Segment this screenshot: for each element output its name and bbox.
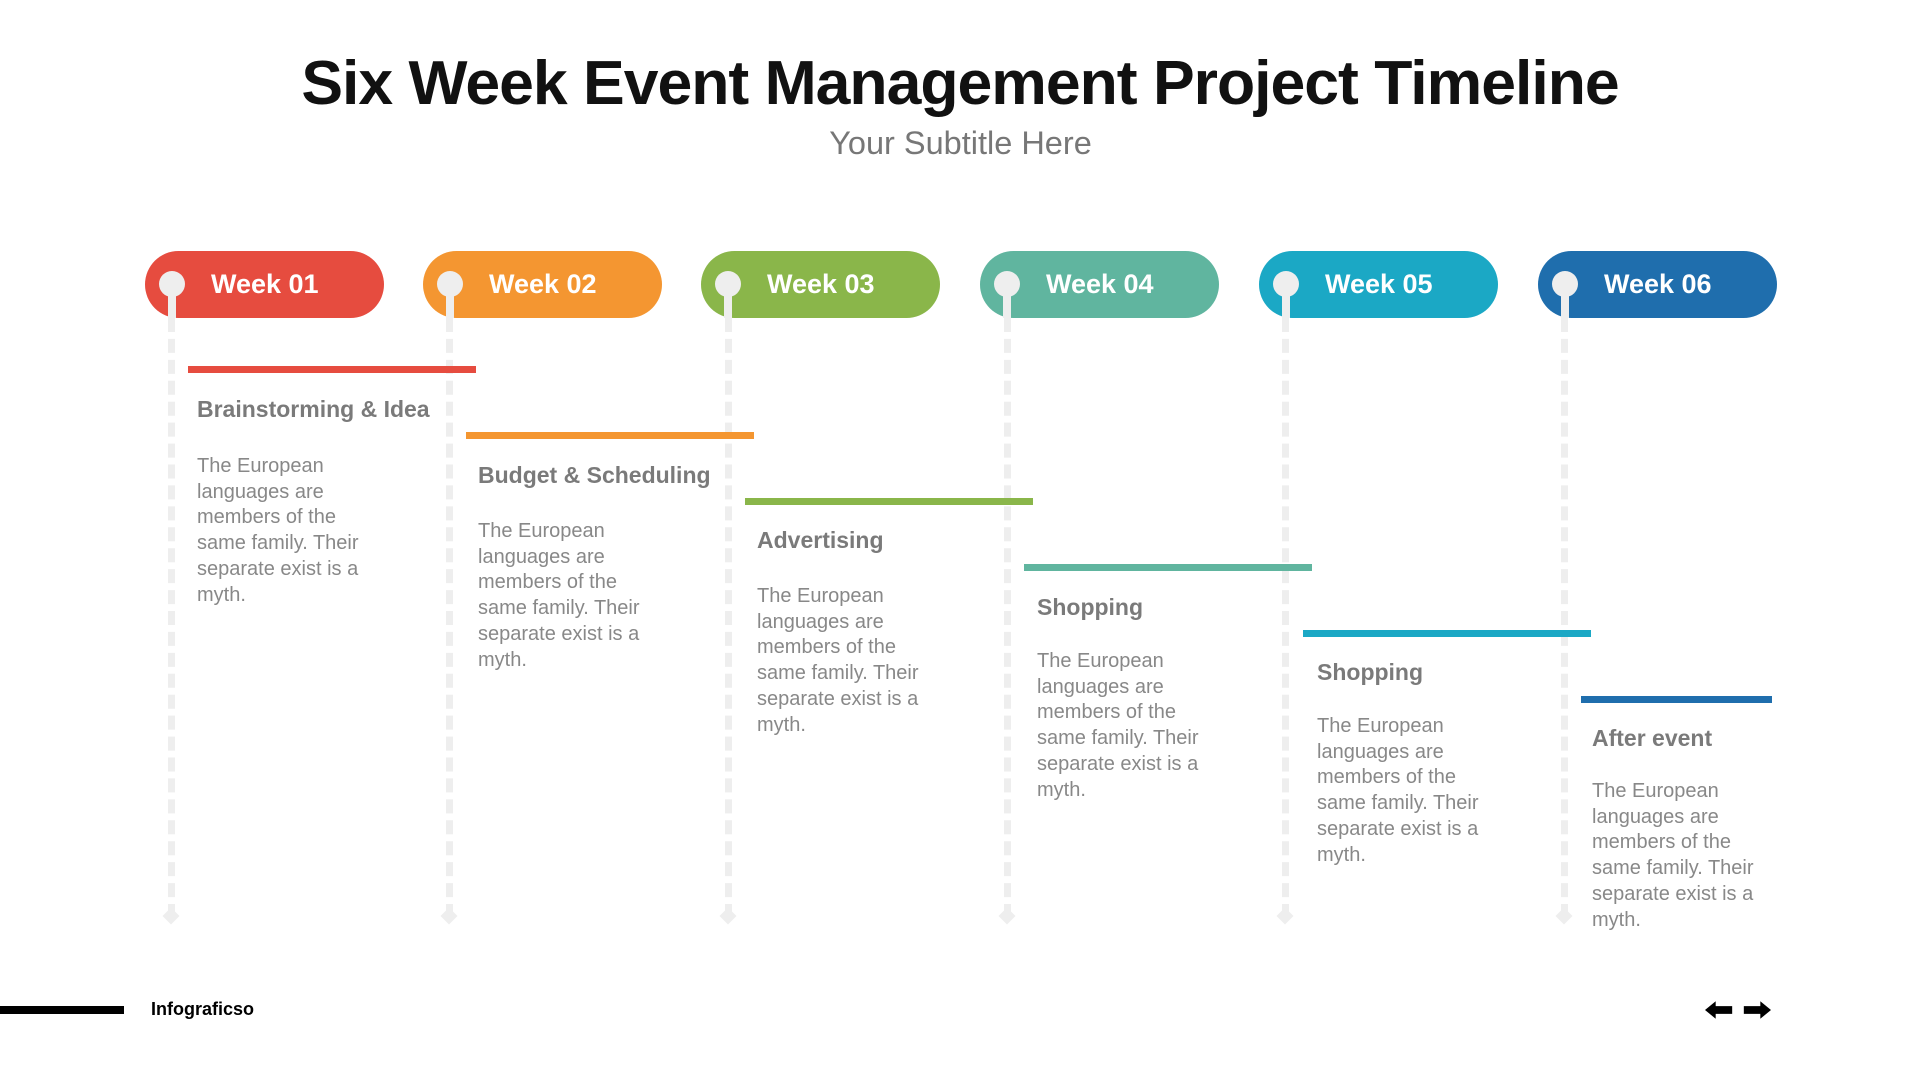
heading 2: Budget & Scheduling xyxy=(478,462,711,488)
dashed line 6 xyxy=(1561,318,1568,918)
text 2: The European languages are members of the same family. Their separate exist is a myth. xyxy=(478,520,640,671)
heading 6: After event xyxy=(1592,725,1712,751)
diamond 4 xyxy=(999,908,1015,924)
bar 2 xyxy=(466,432,754,439)
footer bar xyxy=(0,1006,124,1014)
pill: week 06 xyxy=(1538,251,1777,318)
heading 5: Shopping xyxy=(1317,659,1423,685)
bar 6 xyxy=(1581,696,1772,703)
dashed line 4 xyxy=(1004,318,1011,918)
icon: nav arrows xyxy=(1705,1001,1771,1019)
pill: week 05: Week 05 xyxy=(1325,269,1433,299)
diamond 2 xyxy=(441,908,457,924)
pill: week 01 xyxy=(145,251,384,318)
bar 1 xyxy=(188,366,476,373)
dashed line 3 xyxy=(725,318,732,918)
title: Six Week Event Management Project Timeline xyxy=(301,48,1619,118)
diamond 5 xyxy=(1277,908,1293,924)
bar 5 xyxy=(1303,630,1591,637)
dashed line 5 xyxy=(1282,318,1289,918)
diamond 6 xyxy=(1556,908,1572,924)
text 1: The European languages are members of the same family. Their separate exist is a myth. xyxy=(197,455,359,606)
pill: week 03 xyxy=(701,251,940,318)
bar 4 xyxy=(1024,564,1312,571)
text 3: The European languages are members of the same family. Their separate exist is a myth. xyxy=(757,585,919,736)
text 5: The European languages are members of the same family. Their separate exist is a myth. xyxy=(1317,715,1479,866)
bar 3 xyxy=(745,498,1033,505)
heading 4: Shopping xyxy=(1037,594,1143,620)
pill: week 06: Week 06 xyxy=(1604,269,1712,299)
text 6: The European languages are members of the same family. Their separate exist is a myth. xyxy=(1592,780,1754,931)
dashed line 2 xyxy=(446,318,453,918)
pill: week 03: Week 03 xyxy=(767,269,875,299)
pill: week 04 xyxy=(980,251,1219,318)
pill: week 05 xyxy=(1259,251,1498,318)
heading 1: Brainstorming & Idea xyxy=(197,396,430,422)
pill: week 04: Week 04 xyxy=(1046,269,1154,299)
text 4: The European languages are members of the same family. Their separate exist is a myth. xyxy=(1037,650,1199,801)
pill: week 02: Week 02 xyxy=(489,269,597,299)
subtitle: Your Subtitle Here xyxy=(829,125,1092,161)
heading 3: Advertising xyxy=(757,527,884,553)
pill: week 01: Week 01 xyxy=(211,269,319,299)
footer brand: Infograficso xyxy=(151,999,254,1019)
diamond 3 xyxy=(720,908,736,924)
diamond 1 xyxy=(163,908,179,924)
dashed line 1 xyxy=(168,318,175,918)
pill: week 02 xyxy=(423,251,662,318)
